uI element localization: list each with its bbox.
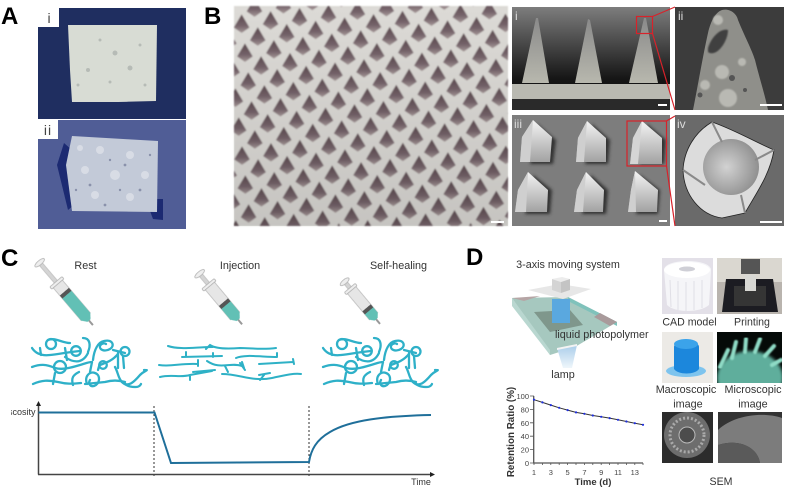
label: CAD model: CAD model: [662, 316, 717, 328]
photo i: foam on dark blue: [38, 8, 186, 119]
line chart: viscosity over time: [0, 401, 435, 487]
y tick labels: 0: [525, 459, 529, 468]
axis title: Retention Ratio (%): Retention Ratio (%): [506, 387, 517, 477]
SEM panel i: needle side view: [512, 7, 670, 110]
axes: [534, 396, 643, 463]
x tick labels: 13: [631, 468, 639, 477]
panel label D: D: [466, 244, 483, 271]
SEM panel ii: needle tip: [675, 7, 784, 110]
SEM panel iii: pyramid needles: [512, 115, 670, 226]
x tick labels: 9: [599, 468, 603, 477]
image: CAD model: [662, 258, 713, 314]
viscosity curve: [38, 412, 431, 463]
heading: Injection: Injection: [220, 260, 260, 272]
panel A: foam photographs: [38, 8, 186, 229]
icon: syringe after self-healing: [338, 276, 385, 328]
axis label: Viscosity (clipped): Viscosity: [0, 407, 36, 417]
panel label A: A: [1, 3, 18, 30]
SEM panel i: needle side view: i: [515, 9, 518, 23]
label: lamp: lamp: [551, 369, 575, 381]
image: macroscopic photo: [662, 332, 713, 383]
axis label: Time: Time: [411, 477, 431, 487]
y tick labels: 40: [521, 432, 529, 441]
image: Printing: [717, 258, 782, 314]
SEM panel iii: pyramid needles: iii: [514, 117, 522, 131]
x tick labels: 1: [532, 468, 536, 477]
label: Microscopic image: Microscopic: [724, 384, 782, 396]
panel B: microneedle array photo: [234, 6, 508, 226]
panel label C: C: [1, 245, 18, 272]
diagram: re-entangled network after self-healing: [323, 338, 438, 387]
diagram: aligned strands during injection: [159, 345, 301, 380]
y tick labels: 100: [516, 392, 529, 401]
label: Microscopic image: image: [738, 398, 768, 410]
diagram: 3D printer schematic: [512, 259, 649, 381]
line chart: retention ratio: [506, 387, 644, 488]
panel label B: B: [204, 3, 221, 30]
y tick labels: 60: [521, 419, 529, 428]
label: 3-axis moving system: 3-axis moving system: [516, 259, 620, 271]
heading: Rest: Rest: [74, 260, 97, 272]
callout: zoom connectors: [627, 7, 675, 226]
diagram: entangled network at rest: [32, 338, 147, 387]
x tick labels: 5: [566, 468, 570, 477]
label: SEM: SEM: [710, 476, 732, 488]
x tick labels: [532, 468, 639, 477]
x tick labels: 3: [549, 468, 553, 477]
y tick labels: [516, 392, 529, 468]
image: microscopic fluorescence: [717, 332, 782, 383]
label: Printing: Printing: [734, 316, 770, 328]
y tick labels: 20: [521, 446, 529, 455]
SEM panel iv: needle top view: iv: [677, 117, 686, 131]
image: SEM close-up: [718, 412, 782, 463]
icon: syringe at rest: [32, 256, 99, 330]
label: Macroscopic image: Macroscopic: [656, 384, 717, 396]
label: Macroscopic image: [656, 384, 717, 410]
icon: syringe during injection: [192, 267, 248, 329]
image: SEM whole view: [662, 412, 713, 463]
SEM panel iv: needle top view: [675, 115, 784, 226]
heading: Self-healing: Self-healing: [370, 260, 427, 272]
label: Macroscopic image: image: [673, 398, 703, 410]
label: liquid photopolymer: liquid photopolymer: [555, 329, 649, 341]
retention curve: [534, 400, 643, 425]
label: Microscopic image: [724, 384, 782, 410]
SEM panel ii: needle tip: ii: [678, 9, 683, 23]
photo ii: wet foam on blue: [38, 120, 186, 229]
photo i: foam on dark blue: i: [47, 10, 51, 26]
data points: [533, 399, 644, 426]
axis title: Time (d): Time (d): [575, 477, 611, 488]
y tick labels: 80: [521, 405, 529, 414]
x tick labels: 7: [582, 468, 586, 477]
photo ii: wet foam on blue: ii: [44, 122, 52, 138]
x tick labels: 11: [614, 468, 622, 477]
